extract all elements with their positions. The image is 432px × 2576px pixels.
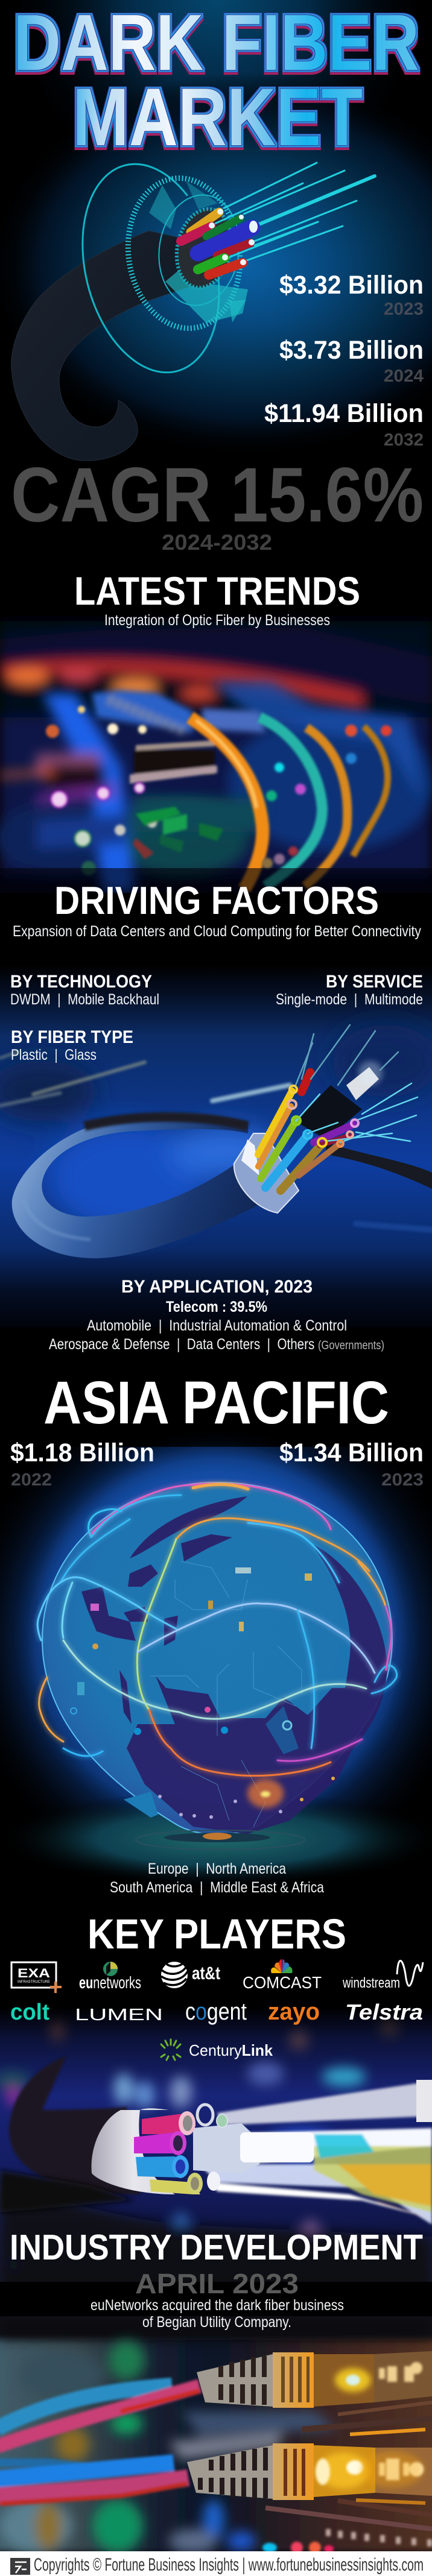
heading: key players: KEY PLAYERS	[87, 1910, 346, 1957]
logo: CenturyLink	[161, 2039, 273, 2060]
value 2023: 2023	[381, 1470, 424, 1490]
panel: segmentation with cable photo	[0, 965, 432, 1353]
market value 2023	[279, 271, 424, 319]
photo: rack shelves	[265, 2402, 432, 2529]
CAGR figure: 2024-2032	[162, 530, 272, 555]
icon: cable end disk	[170, 204, 238, 293]
bokeh lights	[46, 706, 392, 875]
panel: footer	[0, 2551, 432, 2576]
panel: industry development text	[10, 2228, 423, 2331]
icon: cable core	[193, 2123, 259, 2173]
market value 2023: 2023	[384, 300, 424, 319]
panel: industry development text: APRIL 2023	[135, 2268, 299, 2299]
heading: latest trends: Integration of Optic Fiber by Businesses	[104, 612, 330, 629]
by fiber type: Plastic | Glass	[11, 1047, 97, 1063]
logo: CenturyLink: CenturyLink	[189, 2041, 273, 2059]
panel: latest trends photo	[0, 621, 432, 898]
heading: latest trends: LATEST TRENDS	[74, 568, 360, 613]
market value 2023: $3.32 Billion	[279, 271, 424, 300]
land masses	[81, 1496, 387, 1834]
logo: euNetworks: eunetworks	[79, 1973, 141, 1992]
icon: dark cable behind	[326, 1142, 432, 1189]
other regions: Europe | North America	[148, 1860, 286, 1877]
tube ends	[288, 1086, 358, 1147]
value 2022: 2022	[11, 1470, 52, 1490]
chips and lights	[71, 1567, 335, 1819]
logo: EXA Infrastructure: EXA	[17, 1967, 50, 1980]
icon: cable beams	[193, 2081, 432, 2225]
globe base	[136, 1830, 305, 1850]
logo: Windstream	[342, 1960, 423, 1991]
by service	[276, 972, 423, 1008]
market value 2032: $11.94 Billion	[264, 399, 424, 428]
by technology: DWDM | Mobile Backhaul	[10, 991, 159, 1008]
by service: BY SERVICE	[326, 972, 423, 992]
icon: blue and pink cables	[0, 2385, 200, 2504]
market value 2032	[264, 399, 424, 450]
panel: driving factors band: DRIVING FACTORS	[54, 878, 379, 922]
photo: LED strip	[262, 2529, 432, 2554]
fade over the photo bottom	[0, 868, 432, 893]
icon: colored tubes	[181, 212, 252, 275]
icon: globe	[37, 1458, 397, 1850]
by application: Automobile | Industrial Automation & Control	[87, 1317, 347, 1334]
logo: Colt: colt	[10, 2000, 49, 2025]
panel: Asia Pacific region	[0, 1369, 432, 1923]
logo: Zayo: zayo	[268, 1998, 320, 2025]
panel: header with cable illustration	[0, 0, 432, 470]
icon: lower connector	[187, 2443, 432, 2500]
value 2023: $1.34 Billion	[279, 1438, 424, 1467]
market value 2024	[279, 336, 424, 386]
base glow	[0, 1784, 432, 1893]
logo: EXA Infrastructure	[11, 1962, 62, 1993]
logo: Telstra: Telstra	[345, 2000, 423, 2024]
icon: looped blue cable	[12, 1113, 287, 1258]
heading: latest trends	[74, 568, 360, 629]
other regions: South America | Middle East & Africa	[110, 1879, 324, 1896]
by fiber type	[11, 1027, 133, 1063]
logo: AT&T: at&t	[192, 1963, 220, 1983]
by application	[49, 1277, 384, 1353]
value 2022: $1.18 Billion	[10, 1438, 154, 1467]
by application: BY APPLICATION, 2023	[121, 1277, 313, 1297]
logo: Comcast: COMCAST	[243, 1973, 322, 1992]
icon: Fortune Business Insights logo	[10, 2558, 30, 2575]
icon: colored tubes	[134, 2105, 227, 2194]
icon: silver collar	[234, 1133, 299, 1213]
logo: Lumen: LUMEN	[75, 2005, 163, 2024]
market value 2024: 2024	[384, 367, 424, 386]
icon: upper connector	[197, 2351, 432, 2408]
black caption band	[0, 2282, 432, 2316]
market value 2024: $3.73 Billion	[279, 336, 424, 365]
value 2022	[10, 1438, 154, 1490]
by fiber type: BY FIBER TYPE	[11, 1027, 133, 1047]
panel: company logos	[10, 1959, 423, 2060]
logo: Comcast	[243, 1959, 322, 1992]
by application: Aerospace & Defense | Data Centers | Others (Governments)	[49, 1336, 384, 1353]
icon: black cable	[11, 231, 199, 461]
icon: white cable ring	[92, 2108, 175, 2194]
panel: industry development text: of Begian Utility Company.	[142, 2314, 291, 2331]
light streaks	[0, 1052, 432, 1230]
panel: driving factors band	[0, 878, 432, 971]
glowing network lines	[37, 1484, 397, 1776]
logo: Cogent: cogent	[185, 1998, 247, 2025]
circuit traces	[151, 1561, 302, 1827]
logo: Windstream: windstream	[342, 1975, 400, 1991]
panel: industry development text: euNetworks acquired the dark fiber business	[91, 2297, 344, 2314]
icon: fat black cable	[9, 2056, 141, 2194]
by technology: BY TECHNOLOGY	[10, 972, 152, 992]
icon: light fibers	[214, 163, 375, 261]
icon: colored tubes bundle	[258, 1072, 354, 1191]
by technology	[10, 972, 159, 1008]
title	[13, 0, 419, 163]
logo: euNetworks	[79, 1962, 141, 1992]
logo: EXA Infrastructure: INFRASTRUCTURE	[17, 1980, 51, 1984]
panel: development photo background	[0, 2008, 432, 2321]
panel: network cables photo	[0, 2316, 432, 2554]
icon: central black core	[296, 1085, 362, 1139]
by application: Telecom : 39.5%	[166, 1299, 267, 1315]
other regions	[110, 1860, 324, 1896]
logo: AT&T	[161, 1962, 220, 1988]
market value 2032: 2032	[384, 430, 424, 450]
value 2023	[279, 1438, 424, 1490]
icon: bright fibers	[296, 1083, 418, 1142]
icon: tech rings around cable	[62, 150, 250, 387]
heading: Asia Pacific: ASIA PACIFIC	[43, 1369, 389, 1437]
title: MARKET	[72, 71, 363, 163]
